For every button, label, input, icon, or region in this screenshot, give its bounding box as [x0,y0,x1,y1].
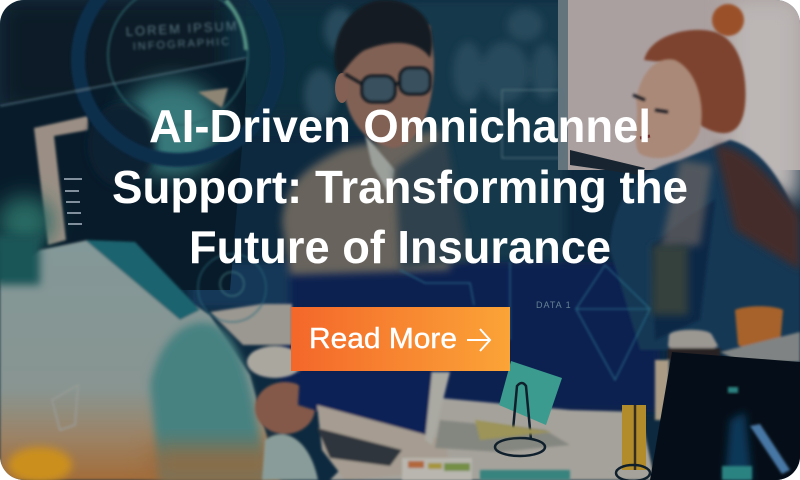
read more button: Read More [309,323,457,355]
hud circle [0,0,278,160]
hud text [125,20,237,50]
coffee cup [655,330,720,420]
back wall [558,0,800,200]
hud lines [198,90,650,380]
hud data label: DATA 1 [536,300,572,310]
hud text: LOREM IPSUM [125,18,239,39]
yellow pencil holder [616,405,650,480]
white shirt person [0,235,280,480]
read more button [291,307,510,371]
headline: Support: Transforming the [112,161,688,213]
hud text: INFOGRAPHIC [133,36,231,53]
laptop at left [0,58,246,290]
data blobs on screen [304,8,559,121]
arrow icon [467,329,490,351]
orange cup [720,306,800,362]
sticky note holder [475,361,562,456]
glasses [345,68,430,102]
headline: AI-Driven Omnichannel [149,100,651,152]
desk papers [402,458,570,480]
hands and sleeve [255,382,318,480]
desk and open laptop [210,304,655,480]
headline [112,100,688,273]
headline: Future of Insurance [189,221,611,273]
woman with hair bun [610,4,800,350]
man with glasses [282,0,470,275]
teal glow behind head [0,80,228,248]
black foreground laptop [650,352,800,480]
